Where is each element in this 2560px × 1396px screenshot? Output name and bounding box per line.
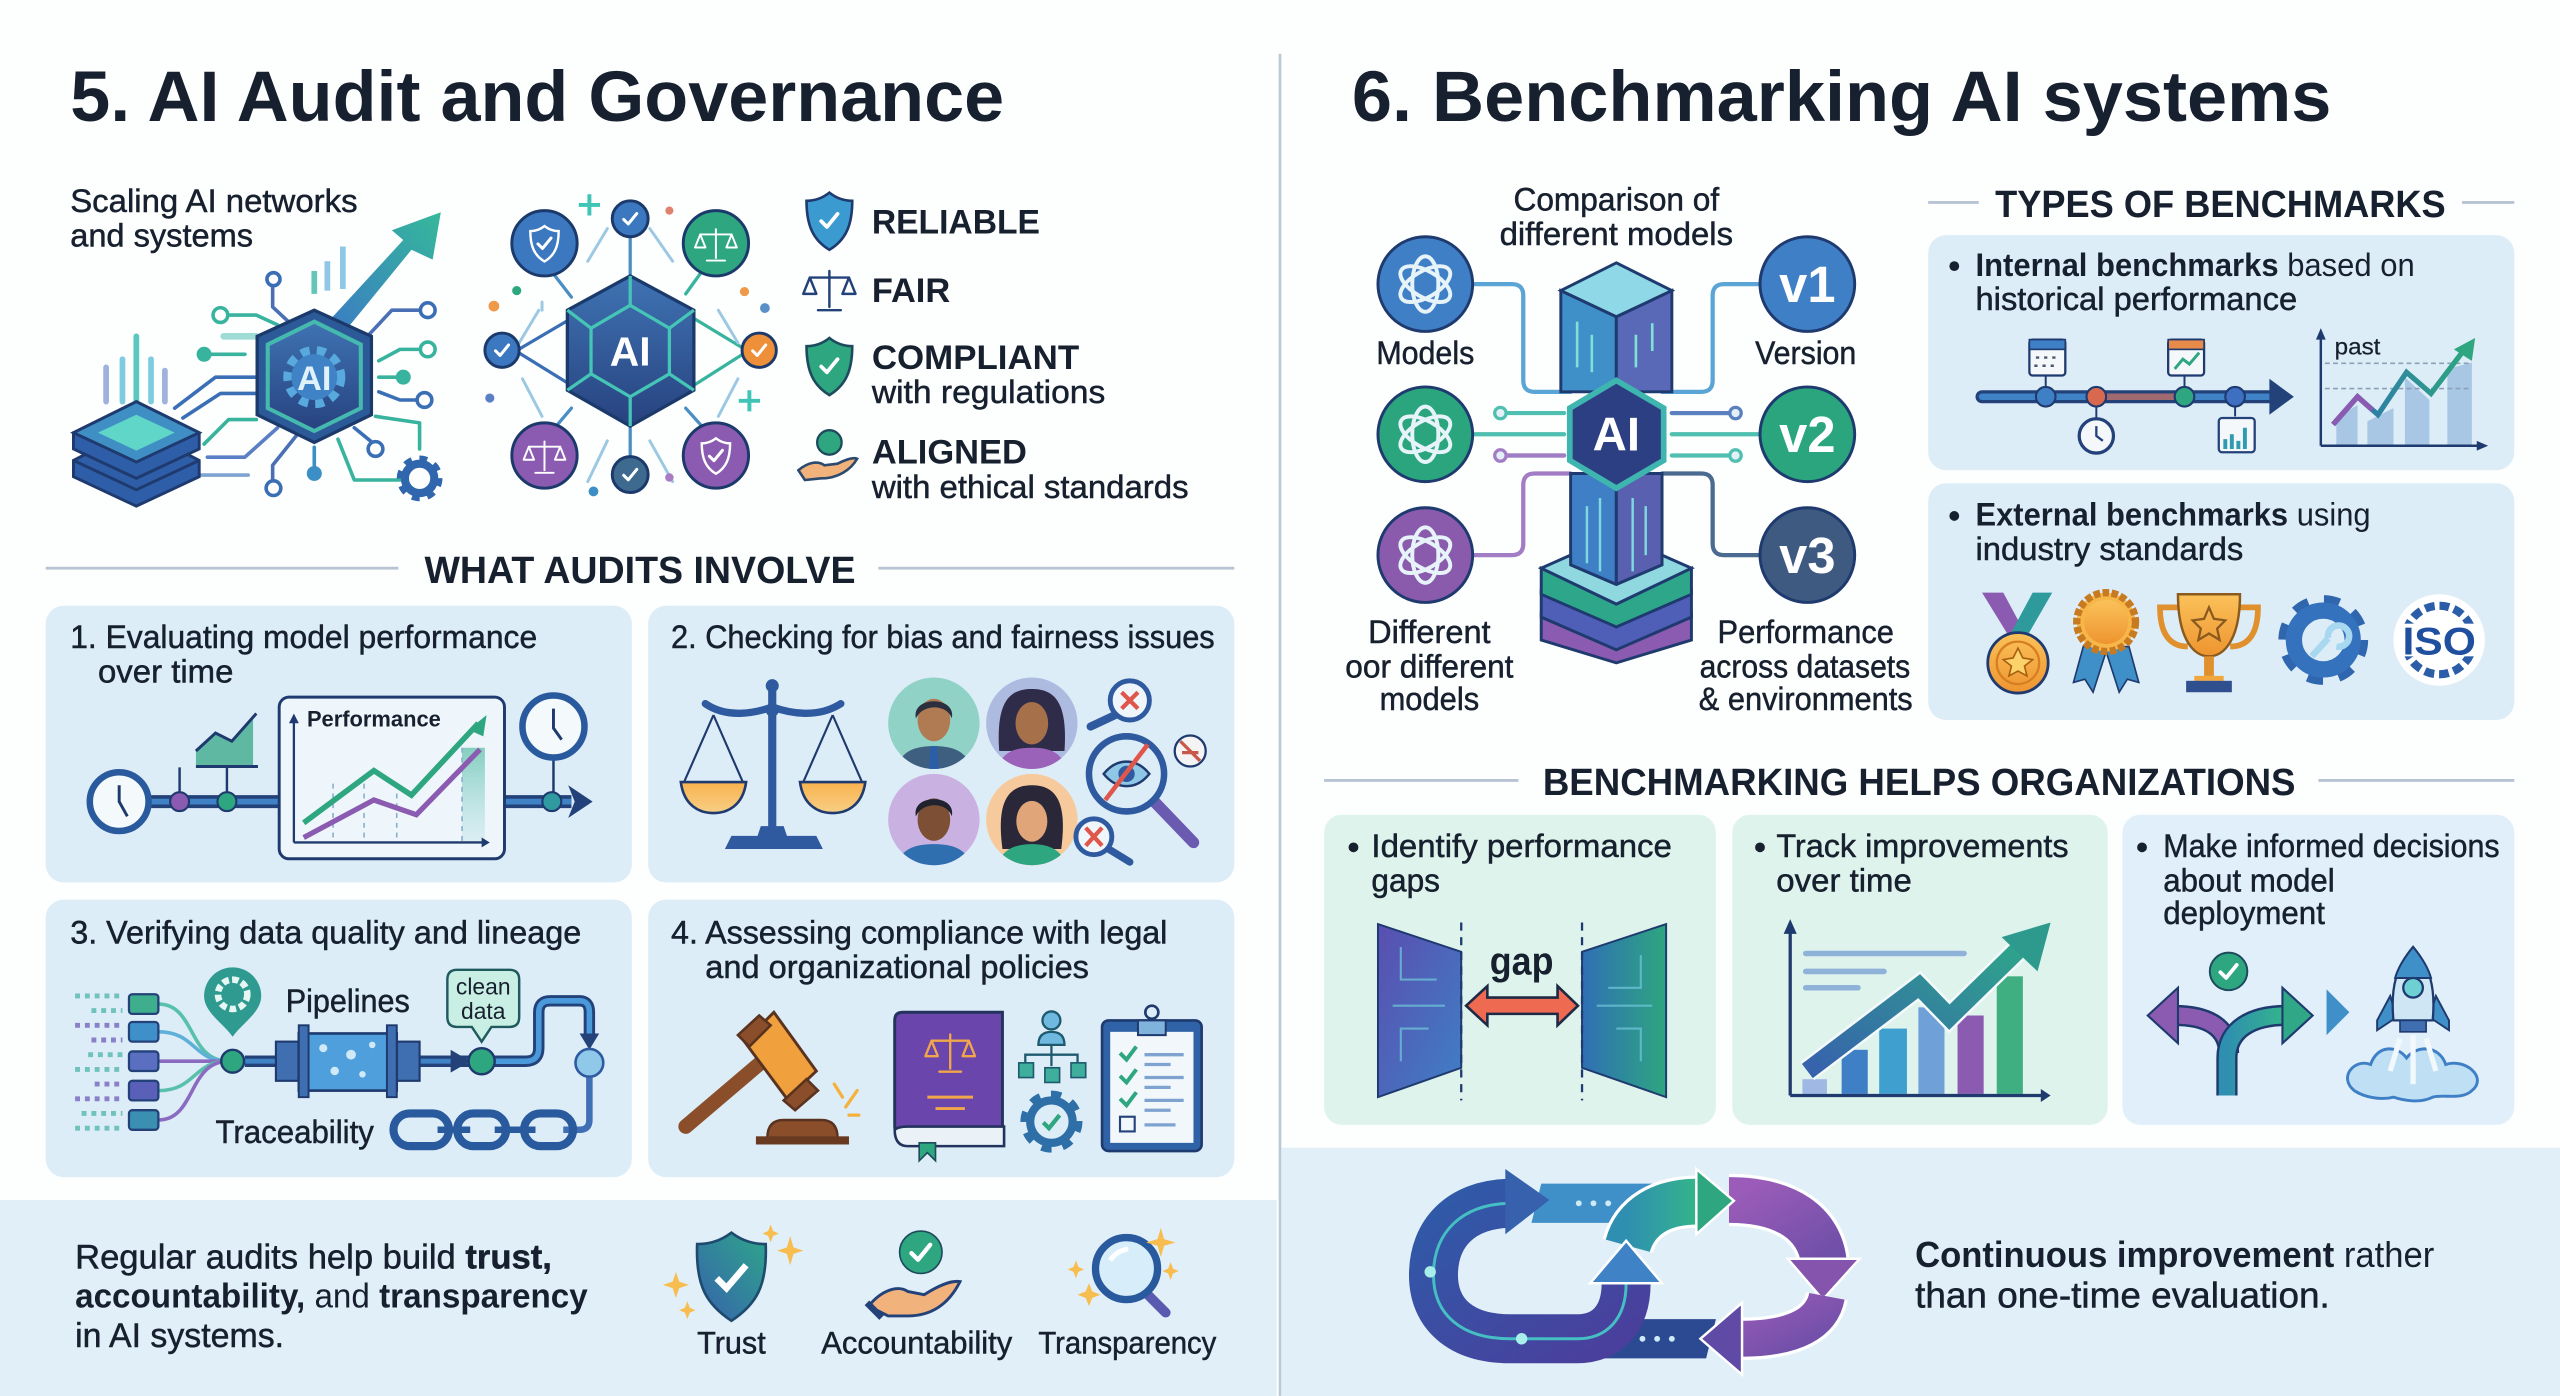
labels: Version — [1755, 334, 1856, 371]
timeline — [1982, 376, 2294, 418]
heading: card 1: over time — [98, 652, 233, 689]
icon: compliant shield — [807, 338, 852, 395]
heading: benchmarking helps organizations: BENCHMARKING HELPS ORGANIZATIONS — [1543, 761, 2296, 803]
text: external benchmarks: industry standards — [1976, 530, 2243, 567]
icons: four diverse people — [888, 678, 1078, 872]
chart: past performance — [2316, 328, 2488, 451]
heading: card 4 — [671, 914, 1167, 985]
text: external benchmarks — [1949, 496, 2371, 567]
version circles: v3 — [1779, 527, 1835, 584]
tower base layers — [1541, 555, 1691, 663]
label: accountability: Accountability — [821, 1325, 1013, 1360]
chart: performance: Performance — [307, 707, 441, 732]
callout: clean data: data — [461, 998, 506, 1024]
text: continuous improvement — [1915, 1234, 2434, 1316]
text: informed decisions — [2137, 827, 2500, 931]
text: regular audits — [75, 1239, 588, 1355]
heading: card 4: 4. Assessing compliance with legal — [671, 914, 1167, 951]
text: track improvements — [1755, 827, 2069, 898]
icon: balance scale — [681, 679, 865, 849]
labels: Different — [1368, 613, 1491, 650]
panel: internal benchmarks — [1928, 235, 2514, 470]
label: trust: Trust — [697, 1325, 766, 1360]
icon: accountability hand — [867, 1231, 960, 1318]
icon: aligned hand — [798, 430, 857, 480]
text: identify gaps: gaps — [1371, 861, 1440, 898]
icon: rosette — [2073, 593, 2139, 692]
text: scaling AI networks: and systems — [70, 217, 253, 254]
list: audit qualities — [798, 193, 1189, 505]
icon: gear — [401, 460, 438, 497]
icon: transparency magnifier — [1096, 1238, 1166, 1313]
icon: clock left — [90, 772, 149, 831]
icon: chain — [393, 1113, 573, 1146]
section 6: Benchmarking AI systems — [1282, 57, 2560, 1396]
data sources — [75, 994, 229, 1130]
text: internal benchmarks — [1949, 246, 2415, 317]
icon: fair scales — [803, 271, 856, 310]
icon: gavel — [686, 1012, 859, 1144]
tower column — [1561, 263, 1672, 584]
icon: continuous improvement loop — [1424, 1169, 1860, 1375]
text: regular audits: in AI systems. — [75, 1317, 284, 1355]
illustration: scaling AI chip and hexagon — [73, 212, 441, 506]
icon: clock — [2079, 419, 2113, 453]
connectors — [1473, 284, 1760, 555]
version circles: v2 — [1779, 406, 1835, 463]
text: informed decisions: about model — [2163, 861, 2335, 898]
label: pipelines: Pipelines — [286, 982, 410, 1019]
icon: medal — [1982, 593, 2052, 693]
illustration: AI governance network: AI — [610, 329, 651, 375]
labels: oor different — [1345, 648, 1513, 685]
pipeline with filter cylinder — [221, 1001, 603, 1130]
title: AI Audit and Governance: 5. AI Audit and Governance — [70, 57, 1004, 137]
icon: gear check — [1025, 1096, 1078, 1148]
icon: org tree — [1019, 1011, 1086, 1082]
icon: calendar chart — [2168, 340, 2204, 376]
icon: clock right — [522, 696, 584, 758]
text: comparison of different models: Comparison of — [1513, 181, 1720, 218]
label: fair: FAIR — [872, 272, 950, 310]
panel: regular audits summary — [0, 1200, 1277, 1396]
icon: trophy — [2160, 594, 2258, 692]
chart: performance — [279, 697, 504, 859]
icon: rocket and cloud — [2348, 947, 2477, 1101]
icon: trust shield — [697, 1233, 766, 1321]
panel: continuous improvement — [1282, 1148, 2560, 1396]
illustration: gap between two models — [1378, 922, 1666, 1100]
text: external benchmarks: External benchmarks using — [1976, 496, 2371, 533]
label: compliant: COMPLIANT — [872, 339, 1079, 377]
text: internal benchmarks: Internal benchmarks based on — [1976, 246, 2415, 283]
callout: clean data: clean — [456, 973, 511, 999]
text: regular audits: Regular audits help build trust, — [75, 1239, 552, 1277]
text: informed decisions: deployment — [2163, 894, 2325, 931]
heading: card 1: 1. Evaluating model performance — [70, 618, 537, 655]
icon: clipboard — [1102, 1006, 1202, 1151]
model circles — [1378, 237, 1473, 602]
text: scaling AI networks: Scaling AI networks — [70, 182, 358, 219]
text: identify gaps — [1349, 827, 1672, 898]
chart: rising bars with arrow — [1784, 919, 2051, 1102]
text: internal benchmarks: historical performance — [1976, 280, 2297, 317]
heading: card 1 — [70, 618, 537, 689]
label: aligned — [871, 434, 1189, 505]
text: identify gaps: Identify performance — [1371, 827, 1672, 864]
label: aligned: ALIGNED — [872, 434, 1027, 472]
heading: what audits involve: WHAT AUDITS INVOLVE — [424, 549, 856, 591]
labels: Performance — [1718, 613, 1894, 650]
label: traceability: Traceability — [216, 1113, 375, 1150]
panel: 4 assessing compliance — [648, 900, 1234, 1177]
heading: card 3: 3. Verifying data quality and lineage — [70, 914, 581, 951]
labels: & environments — [1699, 680, 1913, 717]
text: track improvements: Track improvements — [1776, 827, 2069, 864]
icon: sparkles around trust — [663, 1224, 803, 1319]
label: compliant — [871, 339, 1105, 410]
title: Benchmarking AI systems: 6. Benchmarking AI systems — [1352, 57, 2331, 137]
section 5: AI Audit and Governance — [0, 57, 1277, 1396]
panel: track improvements — [1732, 815, 2108, 1125]
diagram: model comparison tower — [1345, 237, 1913, 717]
illustration: AI governance network — [485, 194, 776, 496]
icon: law book — [895, 1012, 1004, 1161]
icon: decision fork — [2148, 953, 2313, 1096]
text: informed decisions: Make informed decisions — [2163, 827, 2500, 864]
labels: across datasets — [1700, 648, 1910, 685]
callout: clean data — [447, 970, 519, 1042]
label: transparency: Transparency — [1038, 1325, 1217, 1360]
icon: reliable shield — [807, 193, 852, 250]
chart: past performance: past — [2335, 333, 2381, 359]
text: continuous improvement: than one-time evaluation. — [1915, 1275, 2330, 1316]
timeline — [139, 759, 593, 818]
version circles: v1 — [1779, 256, 1835, 313]
icon: ISO badge: ISO — [2402, 621, 2476, 664]
icon: gear wrench — [2286, 602, 2361, 678]
panel: make informed decisions — [2122, 815, 2514, 1125]
text: comparison of different models — [1500, 181, 1733, 252]
icons: magnifiers — [1076, 681, 1206, 862]
heading: types of benchmarks: TYPES OF BENCHMARKS — [1995, 183, 2446, 225]
text: comparison of different models: different models — [1500, 215, 1733, 252]
text: track improvements: over time — [1776, 861, 1912, 898]
AI hexagon: AI — [1593, 409, 1640, 462]
icon: mini bars — [2219, 418, 2255, 452]
labels: Models — [1376, 334, 1474, 371]
divider between sections — [1279, 54, 1281, 1396]
text: continuous improvement: Continuous improvement rather — [1915, 1234, 2434, 1275]
text: scaling AI networks — [70, 182, 358, 254]
panel: external benchmarks — [1928, 483, 2514, 720]
illustration: scaling AI chip and hexagon: AI — [297, 360, 331, 398]
AI hexagon — [1570, 380, 1664, 488]
heading: card 2: 2. Checking for bias and fairness issues — [671, 618, 1215, 655]
label: aligned: with ethical standards — [871, 468, 1189, 505]
mini chart — [196, 713, 258, 767]
icon: calendar — [2029, 340, 2065, 376]
labels — [1345, 334, 1913, 717]
labels: models — [1380, 680, 1479, 717]
text: regular audits: accountability, and transparency — [75, 1278, 588, 1316]
label: compliant: with regulations — [871, 373, 1105, 410]
icon: sparkles around transparency — [1068, 1228, 1179, 1306]
icon: small triangle — [2327, 989, 2349, 1035]
icon: data pin — [204, 967, 261, 1037]
panel: identify performance gaps — [1324, 815, 1716, 1125]
panel: 2 checking for bias — [648, 606, 1234, 882]
label: reliable: RELIABLE — [872, 203, 1040, 241]
panel: 1 evaluating model performance — [46, 606, 632, 882]
illustration: gap between two models: gap — [1490, 941, 1553, 984]
icon: ISO badge — [2393, 594, 2485, 686]
heading: card 4: and organizational policies — [705, 948, 1089, 985]
version circles — [1760, 237, 1855, 602]
panel: 3 verifying data quality — [46, 900, 632, 1177]
